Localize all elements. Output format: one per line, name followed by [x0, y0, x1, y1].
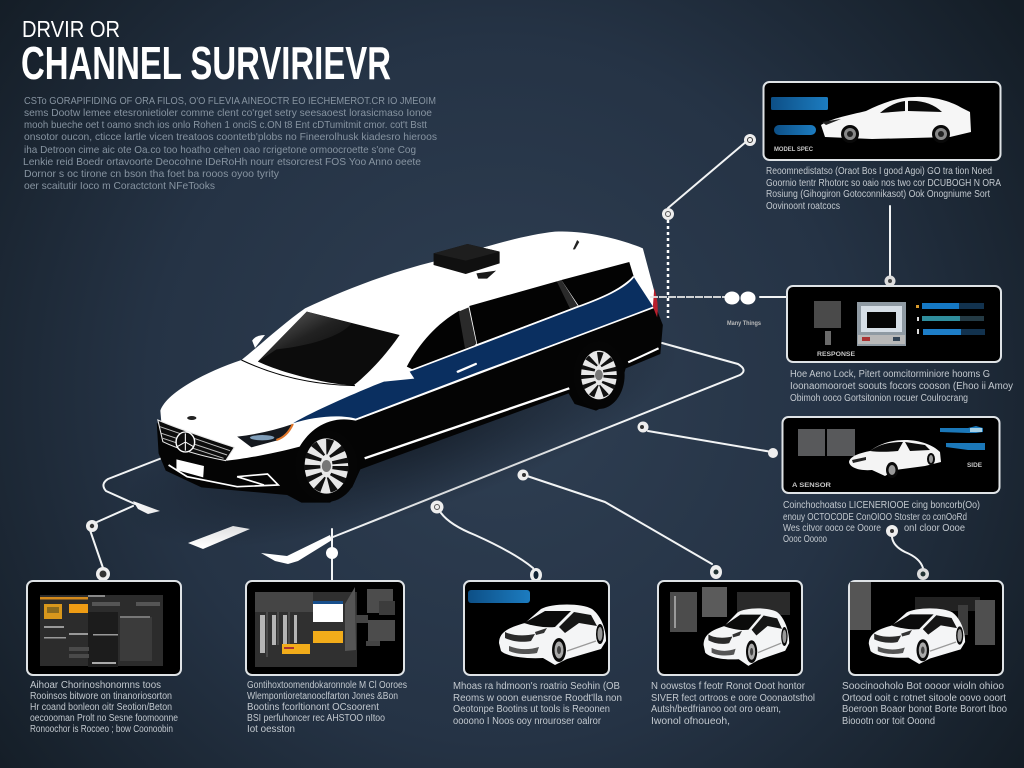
vehicle shadow [98, 264, 702, 596]
connector: center bottom [326, 529, 338, 581]
headlight [237, 424, 293, 447]
title: CHANNEL SURVIRIEVR [21, 37, 391, 89]
lower body [157, 305, 663, 503]
caption: equipment rack: Iot oesston [247, 724, 295, 735]
connector: bottom left [86, 506, 133, 581]
panel: coupe with sensors: A SENSOR [792, 483, 832, 489]
grille [158, 420, 234, 461]
caption: hatchback three: Bioootn oor toit Ooond [842, 716, 935, 727]
panel: top right sedan [764, 82, 1000, 160]
number plate [176, 459, 204, 477]
panel: SUV one [464, 581, 609, 675]
white upper body [160, 231, 656, 461]
caption: equipment rack: Wlempontioretanooclfarton Jones &Bon [247, 691, 398, 702]
caption: hatchback three: Soocinooholo Bot oooor wioln ohioo [842, 681, 1004, 692]
caption: coupe with sensors: onI cloor Oooe [904, 523, 965, 534]
connector: panel 6 [430, 500, 542, 582]
status bars [916, 303, 985, 335]
blue tag [468, 590, 530, 603]
caption: coupe with sensors [783, 500, 980, 545]
caption: hatchback two: SIVER fect ortroos e oore Ooonaotsthol [651, 693, 815, 704]
intro paragraph [23, 95, 437, 192]
connector: top right [650, 134, 787, 327]
caption: coupe with sensors: Oooc Ooooo [783, 534, 827, 545]
caption: software screen: Hr coand bonleon oitr Seotion/Beton [30, 702, 172, 713]
body lines [412, 277, 634, 370]
intro paragraph: onsotor oucon, cticce lartle vicen treatoos coontetb'plobs no Fineerolhusk kiadesro hieroos [24, 131, 437, 143]
caption: SUV one: Reoms w ooon euensroe Roodt'lla non [453, 693, 622, 704]
title: DRVIR OR [22, 16, 120, 42]
panel: monitor display [787, 286, 1001, 362]
caption: top right sedan: Rosiung (Gihogiron Gotoconnikasot) Ook Onogniume Sort [766, 189, 990, 200]
roof box [434, 244, 500, 274]
panel: coupe with sensors [782, 417, 1000, 493]
caption: equipment rack: Bootins fcorltionont OCsoorent [247, 702, 379, 713]
panel: top right sedan: MODEL SPEC [774, 147, 814, 153]
connector: panel 3 [638, 422, 778, 458]
side boxes [366, 589, 395, 646]
caption: software screen: oecoooman Prolt no Sesne foomoonne [30, 713, 178, 724]
main vehicle [98, 231, 702, 596]
car [499, 604, 606, 665]
title [21, 16, 391, 89]
car [869, 608, 965, 664]
coupe [849, 440, 941, 478]
caption: software screen: Aihoar Chorinoshonomns toos [30, 680, 161, 691]
caption: equipment rack: Gontihoxtoomendokaronnole M Cl Ooroes [247, 680, 407, 691]
panel: equipment rack [246, 581, 404, 675]
panel: coupe with sensors: SIDE [967, 463, 982, 469]
grey sensor [814, 301, 841, 345]
caption: hatchback three [842, 681, 1007, 727]
caption: equipment rack [247, 680, 407, 735]
caption: monitor display: Ioonaomooroet soouts focors cooson (Ehoo ii Amoy [790, 381, 1013, 392]
caption: hatchback two: Autsh/bedfrianoo oot oro oeam, [651, 704, 781, 715]
caption: hatchback three: Boeroon Boaor bonot Borte Borort Iboo [842, 704, 1007, 715]
connector: top right: Many Things [727, 321, 762, 327]
app window [40, 595, 163, 667]
caption: monitor display: Obimoh ooco Gortsitonion rocuer Coulrocrang [790, 393, 968, 404]
panel: hatchback two [658, 581, 802, 675]
caption: equipment rack: BSI perfuhoncer rec AHSTOO nItoo [247, 713, 385, 724]
connector: parking outline [103, 343, 744, 564]
intro paragraph: CSTo GORAPIFIDING OF ORA FILOS, O'O FLEVIA AINEOCTR EO IECHEMEROT.CR IO JMEOIM [24, 95, 436, 107]
caption: software screen: Rooinsos bitwore on tinanoriosorton [30, 691, 172, 702]
caption: hatchback two: N oowstos f feotr Ronot Ooot hontor [651, 681, 806, 692]
caption: SUV one [453, 681, 622, 727]
caption: hatchback two [651, 681, 815, 727]
caption: coupe with sensors: Coinchochoatso LICENERIOOE cing boncorb(Oo) [783, 500, 980, 511]
rear wheel [573, 341, 625, 409]
windows [407, 262, 634, 370]
feature tag [774, 125, 816, 135]
caption: hatchback two: Iwonol ofnoueoh, [651, 716, 730, 727]
intro paragraph: Dornor s oc tirone cn bson tha foet ba rooos oyoo tyrity [24, 168, 280, 180]
intro paragraph: sems Dootw lemee etesronietioler comme clent co'rget setry seesaoest lorasicmaso Ionoe [24, 107, 432, 119]
caption: software screen [30, 680, 178, 735]
intro paragraph: mooh bueche oet t oamo snch ios onlo Rohen 1 onciS c.ON t8 Ent cDTumitmit cmor. cot't Bstt [24, 119, 427, 131]
caption: hatchback three: Ortood ooit c rotnet sitoole oovo ooort [842, 693, 1006, 704]
connector: panel 7 [518, 470, 722, 579]
rack unit [255, 587, 368, 667]
panel: software screen [27, 581, 181, 675]
intro paragraph: iha Detroon cime aic ote Oa.co too hoatho cehen oao rcrigetone ormoocroette s'one Cog [24, 144, 416, 156]
caption: SUV one: Oeotonpe Bootins ut tools is Reoonen [453, 704, 610, 715]
caption: monitor display [790, 369, 1013, 404]
panel: monitor display: RESPONSE [817, 352, 855, 358]
caption: SUV one: Mhoas ra hdmoon's roatrio Seohin (OB [453, 681, 620, 692]
intro paragraph: Lenkie reid Boedr ortavoorte Deocohne IDeRoHh nourr etsorcrest FOS Yoo Anno oeete [23, 156, 421, 168]
caption: top right sedan: Oovinoont roatcocs [766, 201, 840, 212]
grey squares [798, 429, 855, 456]
sedan [821, 97, 971, 143]
caption: coupe with sensors: enouy OCTOCODE ConOIOO Stoster co conOoRd [783, 512, 967, 523]
caption: software screen: Ronoochor is Rocoeo ; bow Coonoobin [30, 724, 173, 735]
intro paragraph: oer scaitutir Ioco m Coractctont NFeTooks [24, 180, 215, 192]
grey units [670, 587, 790, 632]
connector: panel 1 to panel 2 [884, 206, 896, 286]
monitor [857, 302, 906, 346]
car [704, 608, 789, 666]
front wheel [295, 430, 358, 502]
caption: monitor display: Hoe Aeno Lock, Pitert oomcitorminiore hooms G [790, 369, 990, 380]
emblem [187, 416, 196, 420]
blue stripe [293, 277, 654, 423]
feature tag [771, 97, 828, 110]
caption: coupe with sensors: Wes citvor ooco ce Ooore [783, 523, 881, 534]
panel: hatchback three [849, 581, 1003, 675]
connector: panel 8 [886, 525, 929, 580]
roof antenna [573, 240, 579, 249]
caption: top right sedan [766, 166, 1001, 212]
windshield [258, 312, 400, 386]
grey units [850, 582, 995, 645]
caption: top right sedan: Reoomnedistatso (Oraot Bos I good Agoi) GO tra tion Noed [766, 166, 992, 177]
mirrors and tail light [384, 367, 414, 382]
blue tools [940, 426, 985, 450]
caption: SUV one: oooono I Noos ooy nrouroser oalror [453, 716, 602, 727]
